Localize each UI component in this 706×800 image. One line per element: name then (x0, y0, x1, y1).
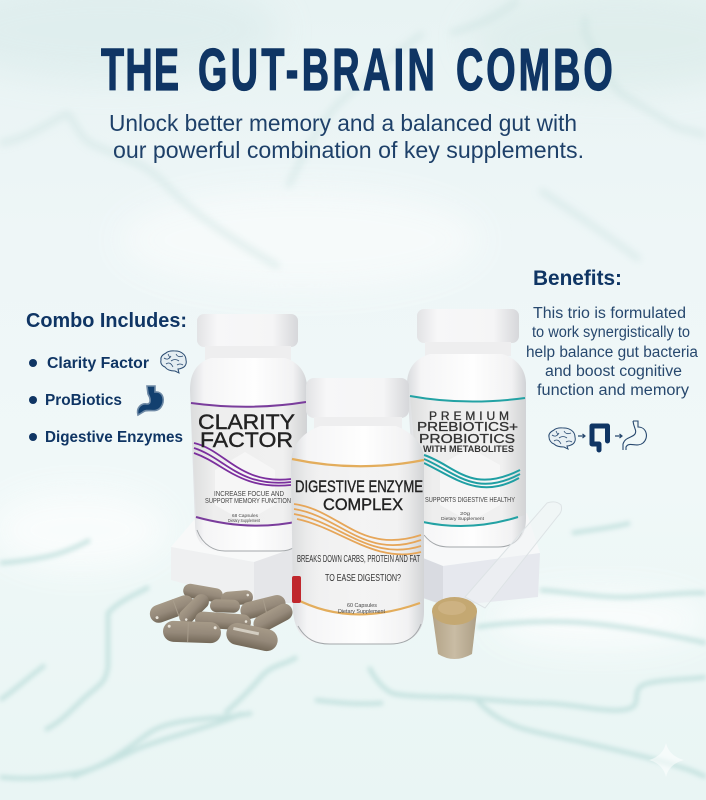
body (407, 354, 526, 547)
scoop with powder (432, 502, 562, 659)
benefits text: function and memory (537, 382, 689, 399)
icon: sparkle watermark (649, 743, 684, 777)
pedestal right (423, 513, 540, 605)
panel: benefits (526, 267, 698, 450)
list item: probiotics: ProBiotics (45, 392, 122, 409)
title: COMBO (456, 38, 613, 103)
label: 68 Capsules (232, 513, 259, 518)
label: 20g (460, 511, 471, 516)
icon: intestine (592, 426, 608, 450)
arrow (615, 434, 622, 438)
panel: combo includes (26, 310, 187, 446)
subtitle: our powerful combination of key supplements. (113, 137, 584, 163)
icon: brain (161, 351, 186, 373)
icon: stomach outline (623, 421, 646, 450)
label: PREMIUM (429, 409, 509, 423)
benefits text: help balance gut bacteria (526, 344, 698, 361)
icon: brain (549, 428, 575, 449)
label: CLARITY (198, 411, 295, 434)
capsules (147, 583, 296, 653)
body (190, 358, 307, 551)
label: TO EASE DIGESTION? (325, 573, 401, 584)
benefits text: and boost cognitive (545, 363, 682, 380)
body (291, 426, 424, 644)
benefits text: to work synergistically to (532, 324, 690, 341)
cap (197, 314, 298, 347)
bottle: clarity factor (190, 314, 307, 551)
list item: digestive enzymes: Digestive Enzymes (45, 429, 183, 446)
label: PREBIOTICS+ (417, 419, 518, 434)
subtitle (109, 110, 584, 163)
label: PROBIOTICS (419, 431, 515, 446)
heading: combo includes: Combo Includes: (26, 310, 187, 332)
title: GUT-BRAIN (198, 38, 435, 103)
bottle: digestive enzyme complex (291, 378, 424, 644)
icon row: brain to gut to stomach (549, 421, 646, 450)
bottle: premium prebiotics (407, 309, 526, 547)
title (101, 38, 613, 103)
label (191, 402, 306, 526)
label: Dietary Supplement (228, 518, 261, 523)
arrow (578, 434, 585, 438)
title: THE (101, 38, 179, 103)
label: WITH METABOLITES (423, 444, 514, 454)
label (292, 459, 424, 615)
label: BREAKS DOWN CARBS, PROTEIN AND FAT (297, 554, 420, 565)
label: INCREASE FOCUE AND (214, 491, 284, 498)
icon: stomach (138, 386, 163, 415)
label (410, 396, 525, 526)
label: SUPPORTS DIGESTIVE HEALTHY (425, 497, 515, 504)
label: 60 Capsules (347, 603, 377, 609)
list item: clarity factor: Clarity Factor (47, 355, 149, 372)
cap (306, 378, 409, 418)
label: FACTOR (200, 429, 293, 452)
benefits text (526, 305, 698, 399)
heading: benefits: Benefits: (533, 267, 622, 290)
cap (417, 309, 519, 343)
subtitle: Unlock better memory and a balanced gut with (109, 110, 577, 136)
label: SUPPORT MEMORY FUNCTION (205, 498, 291, 505)
label: Dietary Supplement (441, 516, 485, 521)
label: COMPLEX (323, 495, 403, 514)
label: DIGESTIVE ENZYME (295, 477, 423, 496)
label: Dietary Supplement (338, 609, 385, 615)
benefits text: This trio is formulated (533, 305, 686, 322)
pedestal left (171, 520, 300, 603)
